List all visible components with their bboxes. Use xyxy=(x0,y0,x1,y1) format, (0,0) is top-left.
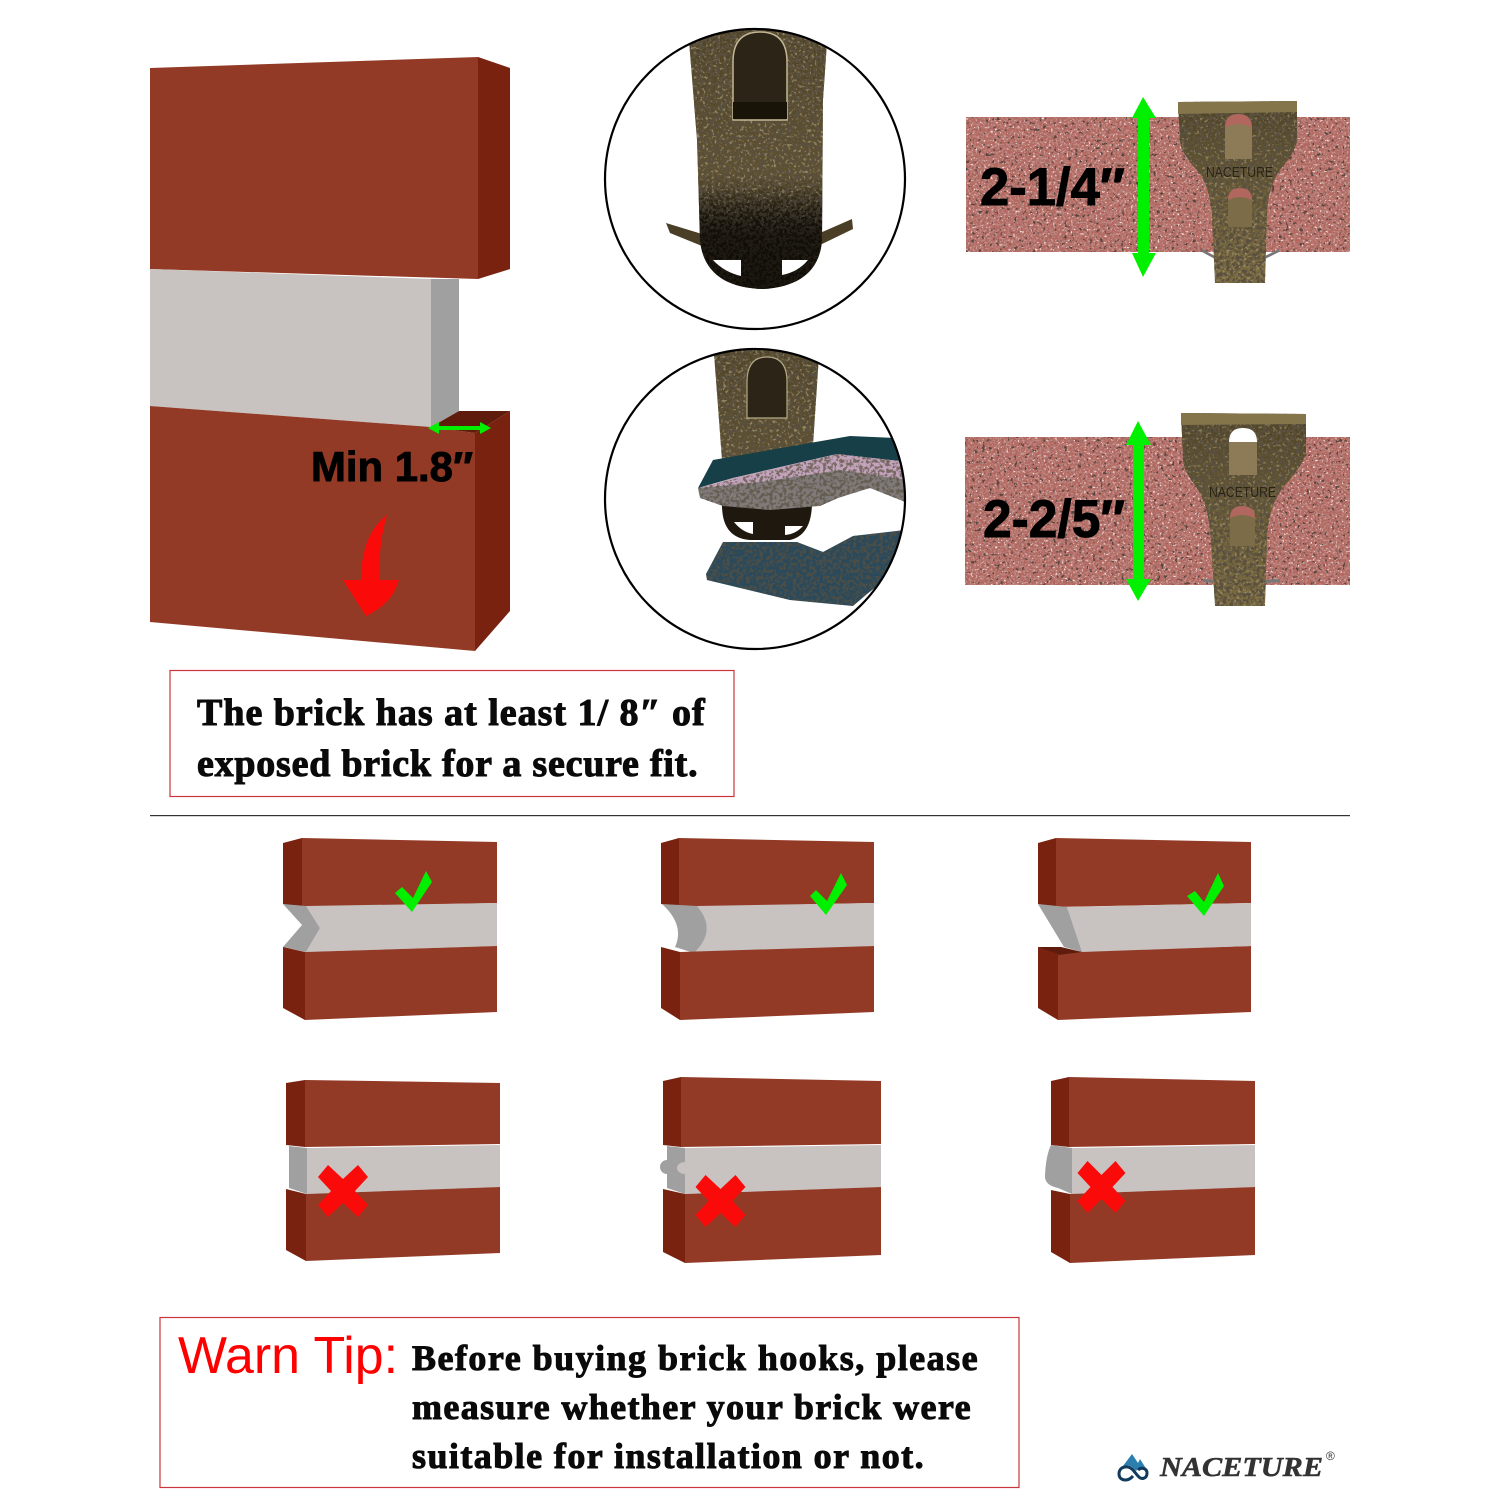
lower plier jaw xyxy=(706,530,900,606)
circle: hook close-up xyxy=(605,28,905,329)
label: Min 1.8: Min 1.8″ xyxy=(311,443,473,490)
circle: pliers bending hook xyxy=(605,340,910,649)
warn tip text: Before buying brick hooks, please xyxy=(412,1338,978,1378)
engraved hook brand: NACETURE xyxy=(1206,164,1273,181)
circle outline xyxy=(605,349,905,649)
label: 2-1/4: 2-1/4″ xyxy=(980,158,1125,217)
icon: red X xyxy=(318,1165,368,1217)
label: 2-2/5: 2-2/5″ xyxy=(983,490,1125,549)
upper plier jaw xyxy=(695,436,910,512)
note text: exposed brick for a secure fit. xyxy=(197,743,698,785)
circle outline xyxy=(605,29,905,329)
icon: check mark xyxy=(810,873,847,915)
upper brick xyxy=(150,57,510,279)
hook arms xyxy=(666,219,853,246)
icon: red X xyxy=(1078,1161,1126,1213)
icon: check mark xyxy=(1187,873,1224,916)
green height arrow xyxy=(1126,421,1151,601)
warn tip text xyxy=(412,1338,978,1476)
good joint: V-shaped mortar xyxy=(283,838,497,1020)
warn tip text: suitable for installation or not. xyxy=(412,1436,924,1476)
registered mark: ® xyxy=(1326,1449,1335,1463)
good joint: concave mortar xyxy=(661,838,874,1020)
icon: water drops xyxy=(1119,1454,1147,1480)
green height arrow xyxy=(1132,97,1156,277)
note text xyxy=(197,692,706,785)
brick texture xyxy=(966,117,1350,252)
lower brick xyxy=(150,406,510,651)
green width arrow xyxy=(428,422,491,434)
large brick wall diagram xyxy=(150,57,510,651)
brand name: NACETURE xyxy=(1159,1452,1323,1482)
brick sample 2-1/4 inch xyxy=(966,97,1350,285)
hook cutouts xyxy=(734,522,803,535)
hook lower part xyxy=(722,502,812,540)
brand logo xyxy=(1119,1449,1335,1482)
engraved hook brand: NACETURE xyxy=(1209,484,1276,501)
brick texture xyxy=(965,437,1350,585)
icon: red X xyxy=(696,1175,746,1227)
bad joint: convex mortar xyxy=(1045,1077,1255,1263)
warn tip text: measure whether your brick were xyxy=(412,1387,971,1427)
callout: warn tip xyxy=(160,1318,1019,1488)
mortar joint xyxy=(150,269,459,427)
icon: check mark xyxy=(395,871,432,912)
hook on brick xyxy=(1175,100,1300,285)
hook on brick xyxy=(1178,410,1308,608)
brick sample 2-2/5 inch xyxy=(965,410,1350,608)
note text: The brick has at least 1/ 8″ of xyxy=(197,692,706,734)
good joint: sloped mortar xyxy=(1038,838,1251,1020)
callout: exposed brick note xyxy=(170,670,734,796)
warn tip heading: Warn Tip: xyxy=(178,1327,398,1385)
hook body xyxy=(689,30,827,289)
bad joint: flush mortar xyxy=(286,1080,500,1261)
red curved arrow xyxy=(343,515,399,616)
hook upper part xyxy=(714,350,818,460)
bad joint: bump mortar xyxy=(660,1077,881,1263)
